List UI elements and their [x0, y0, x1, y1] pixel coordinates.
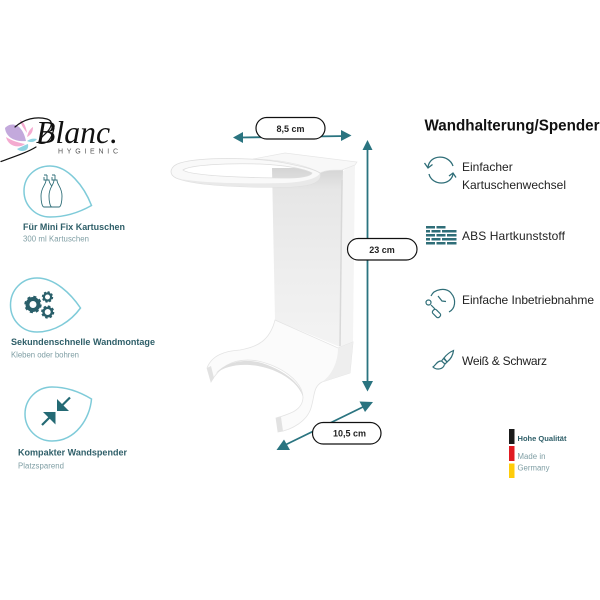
subtext: Platzsparend — [18, 462, 64, 470]
label pill: 8,5 cm — [276, 124, 305, 134]
arrow: width — [233, 130, 352, 143]
title: Wandhalterung/Spender — [424, 118, 600, 134]
dimension: depth 10,5 cm — [276, 402, 381, 450]
text: ABS Hartkunststoff — [462, 229, 566, 243]
panel: wall mounting — [10, 278, 155, 360]
label pill: 23 cm — [369, 245, 395, 255]
icon: drop with gears — [10, 278, 80, 332]
label pill — [348, 238, 417, 260]
feature: cartridge change: Kartuschenwechsel — [462, 178, 566, 192]
subtext: 300 ml Kartuschen — [23, 234, 89, 244]
panel: compact dispenser — [18, 387, 127, 470]
text: Einfacher — [462, 160, 513, 174]
label pill: 10,5 cm — [333, 428, 366, 438]
panel: Mini Fix cartridges — [23, 166, 125, 244]
feature: colours — [433, 350, 547, 369]
badge text — [518, 436, 567, 472]
top plate — [253, 153, 357, 173]
quality badge — [509, 429, 567, 478]
heading: Für Mini Fix Kartuschen — [23, 222, 125, 232]
logo swoosh — [1, 118, 54, 162]
feature: easy commissioning — [426, 289, 594, 318]
base foot — [207, 320, 353, 432]
product: white wall holder — [171, 153, 357, 432]
icon: paint brush — [433, 350, 454, 369]
icon: clock and tool — [426, 289, 455, 318]
text: Weiß & Schwarz — [462, 354, 547, 368]
logo subtitle: HYGIENIC — [58, 148, 118, 156]
logo wordmark: Blanc. — [36, 114, 118, 150]
feature: cartridge change — [424, 157, 566, 192]
icon: drop with compress arrows — [25, 387, 92, 441]
arrow: height — [362, 140, 373, 392]
feature: ABS plastic — [426, 226, 566, 244]
heading: Kompakter Wandspender — [18, 448, 127, 458]
dimension: height 23 cm — [348, 140, 417, 392]
badge text: Made in — [518, 452, 546, 461]
subtext: Kleben oder bohren — [11, 350, 79, 360]
dimension: width 8,5 cm — [233, 118, 352, 143]
arrow: depth — [276, 402, 373, 450]
column side — [340, 162, 355, 350]
column front — [272, 168, 343, 347]
icon: bricks — [426, 226, 456, 244]
flag bars — [509, 429, 514, 478]
icon: drop with bottles — [24, 166, 92, 217]
badge text: Germany — [518, 464, 550, 472]
text: Einfache Inbetriebnahme — [462, 293, 594, 307]
heading: Sekundenschnelle Wandmontage — [11, 337, 155, 347]
badge text: Hohe Qualität — [518, 436, 567, 443]
ring — [171, 158, 320, 187]
logo petals — [5, 120, 37, 151]
icon: refresh arrows — [424, 157, 456, 183]
logo: Blanc Hygienic — [1, 114, 118, 162]
